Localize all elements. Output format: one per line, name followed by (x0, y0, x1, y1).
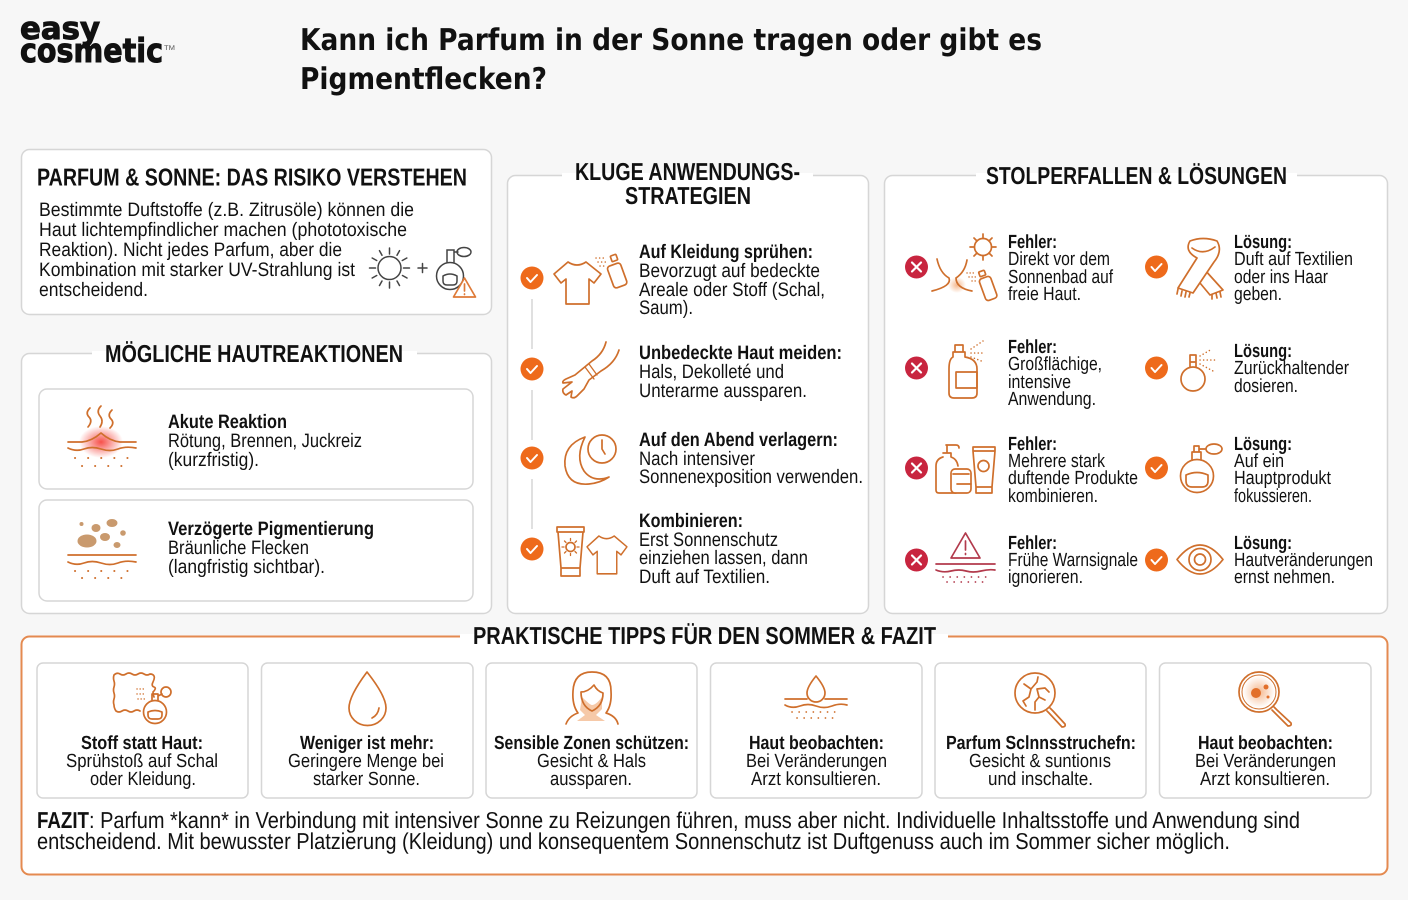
text: conclusion: entscheidend. Mit bewusster Platzierung (Kleidung) und konsequentem Sonnenschutz ist Duftgenuss auch im Sommer sicher möglich. (37, 828, 1230, 854)
heading: tips: PRAKTISCHE TIPPS FÜR DEN SOMMER & FAZIT (473, 623, 936, 650)
icon: pigment spots (68, 519, 136, 578)
icon: check (1145, 356, 1168, 380)
panel: pitfalls and solutions (884, 163, 1388, 614)
text: risk explanation: entscheidend. (39, 279, 148, 301)
text: error 1: freie Haut. (1008, 284, 1081, 305)
text: conclusion: FAZIT (37, 807, 89, 833)
icon: warning on skin (936, 533, 995, 582)
text: solution 3: fokussieren. (1234, 486, 1312, 507)
heading: strategies (575, 159, 800, 210)
text: spray on clothes (639, 241, 825, 319)
row 1 solution (1145, 232, 1353, 305)
heading: risk: PARFUM & SONNE: DAS RISIKO VERSTEHEN (37, 164, 467, 192)
text: error 4: Frühe Warnsignale (1008, 550, 1138, 571)
icon: check (1145, 456, 1168, 480)
icon: arm and hand (563, 342, 619, 398)
text: observe skin: Arzt konsultieren. (751, 769, 881, 790)
text: delayed pigmentation (168, 518, 374, 578)
text: solution 4: ernst nehmen. (1234, 567, 1335, 588)
text: acute reaction: Akute Reaktion (168, 411, 287, 433)
icon: product group (936, 445, 995, 493)
icon: shirt and spray (554, 254, 628, 304)
panel: skin reactions (22, 341, 492, 614)
row 3 solution (1145, 434, 1332, 507)
text: sensitive zones: Gesicht & Hals (537, 751, 646, 772)
text: solution 1: Lösung: (1234, 232, 1292, 253)
text: conclusion (37, 807, 1300, 854)
text: avoid bare skin: Unbedeckte Haut meiden: (639, 342, 842, 364)
text: risk explanation: Kombination mit starker UV-Strahlung ist (39, 259, 356, 281)
text: delayed pigmentation: (langfristig sichtbar). (168, 556, 325, 578)
icon: check (520, 266, 544, 290)
icon: sunscreen tube and shirt (557, 527, 627, 576)
card: delayed pigmentation (39, 500, 473, 601)
text: perfume ingredients: Gesicht & suntionıs (969, 751, 1111, 772)
icon: neck, sun and spray (932, 234, 998, 301)
icon: droplet (349, 672, 386, 725)
row 2 solution (1145, 341, 1350, 397)
text: combine (639, 510, 808, 588)
card: fabric (37, 663, 248, 798)
text: error 4: ignorieren. (1008, 567, 1083, 588)
text: solution 2 (1234, 341, 1350, 397)
heading: strategies: STRATEGIEN (625, 183, 751, 210)
title (300, 23, 1042, 97)
text: less is more: Weniger ist mehr: (300, 733, 434, 754)
text: solution 2: dosieren. (1234, 376, 1298, 397)
text: fabric: oder Kleidung. (90, 769, 196, 790)
text: perfume ingredients: und inschalte. (988, 769, 1093, 790)
text: avoid bare skin: Hals, Dekolleté und (639, 361, 784, 383)
text: solution 1: Duft auf Textilien (1234, 249, 1353, 270)
text: solution 1: geben. (1234, 284, 1282, 305)
icon: moon and clock (565, 435, 616, 484)
card: acute reaction (39, 389, 473, 489)
text: observe skin (746, 733, 887, 790)
text: evening (639, 429, 863, 488)
text: delayed pigmentation: Bräunliche Flecken (168, 537, 309, 559)
text: solution 4 (1234, 533, 1373, 588)
icon: check (520, 358, 544, 380)
icon: woman portrait (566, 672, 618, 724)
icon: magnifier with structure (1015, 673, 1065, 727)
card: less is more (262, 663, 473, 798)
text: combine: Kombinieren: (639, 510, 743, 532)
text: error 2: Großflächige, (1008, 354, 1102, 375)
icon: check (1145, 256, 1168, 278)
panel: risk (22, 150, 492, 314)
title: Pigmentflecken? (300, 62, 547, 97)
text: solution 1: oder ins Haar (1234, 267, 1329, 288)
text: acute reaction: Rötung, Brennen, Juckreiz (168, 430, 362, 452)
text: error 2 (1008, 337, 1102, 410)
text: fabric: Sprühstoß auf Schal (66, 751, 218, 772)
logo: easy (20, 11, 100, 47)
text: spray on clothes: Saum). (639, 297, 693, 319)
icon: x mark (905, 456, 928, 480)
icon: fabric and perfume (114, 673, 171, 724)
row 4 solution (1145, 533, 1373, 588)
icon: perfume bottle (1180, 444, 1222, 492)
text: error 1: Direkt vor dem (1008, 249, 1110, 270)
icon: x mark (905, 548, 928, 572)
text: solution 3: Lösung: (1234, 434, 1292, 455)
text: risk explanation: Bestimmte Duftstoffe (z.B. Zitrusöle) können die (39, 199, 414, 221)
text: solution 3: Auf ein (1234, 451, 1284, 472)
text: error 3: kombinieren. (1008, 486, 1098, 507)
icon: x mark (905, 356, 928, 380)
text: error 2: Anwendung. (1008, 389, 1096, 410)
text: solution 1 (1234, 232, 1353, 305)
heading: pitfalls: STOLPERFALLEN & LÖSUNGEN (986, 163, 1287, 190)
icon: x mark (905, 256, 928, 278)
row 2 error (905, 337, 1102, 410)
text: observe skin 2: Bei Veränderungen (1195, 751, 1336, 772)
text: observe skin 2: Haut beobachten: (1198, 733, 1333, 754)
text: error 3: Fehler: (1008, 434, 1057, 455)
text: error 3: duftende Produkte (1008, 468, 1138, 489)
card: observe skin (710, 663, 922, 798)
text: combine: Duft auf Textilien. (639, 566, 770, 588)
text: combine: Erst Sonnenschutz (639, 529, 778, 551)
icon: sun plus perfume warning (370, 248, 476, 297)
text: sensitive zones: aussparen. (550, 769, 632, 790)
text: error 2: intensive (1008, 372, 1071, 393)
text: less is more: Geringere Menge bei (288, 751, 444, 772)
text: solution 4: Hautveränderungen (1234, 550, 1373, 571)
text: sensitive zones: Sensible Zonen schützen: (494, 733, 689, 754)
text: error 2: Fehler: (1008, 337, 1057, 358)
icon: check (520, 538, 544, 560)
text: spray on clothes: Bevorzugt auf bedeckte (639, 260, 820, 282)
text: perfume ingredients (946, 733, 1136, 790)
panel: strategies (508, 159, 868, 614)
icon: check (520, 446, 544, 470)
logo: cosmetic (20, 31, 163, 70)
icon: skin droplet (785, 676, 847, 718)
text: spray on clothes: Areale oder Stoff (Schal, (639, 279, 825, 301)
heading: skin reactions: MÖGLICHE HAUTREAKTIONEN (105, 341, 403, 368)
text: evening: Auf den Abend verlagern: (639, 429, 838, 451)
row 3 error (905, 434, 1138, 507)
text: observe skin: Haut beobachten: (749, 733, 884, 754)
text: error 3: Mehrere stark (1008, 451, 1105, 472)
panel: summer tips and conclusion (22, 623, 1388, 874)
text: observe skin 2: Arzt konsultieren. (1200, 769, 1330, 790)
text: acute reaction: (kurzfristig). (168, 449, 259, 471)
text: solution 2: Zurückhaltender (1234, 358, 1350, 379)
logo: TM (164, 45, 175, 52)
text: perfume ingredients: Parfum Sclnnsstruchefn: (946, 733, 1136, 754)
icon: check (1145, 548, 1168, 572)
text: evening: Nach intensiver (639, 448, 755, 470)
text: error 4 (1008, 533, 1138, 588)
text: avoid bare skin (639, 342, 842, 402)
card: observe skin 2 (1160, 663, 1371, 798)
item: spray on clothes (520, 241, 825, 319)
icon: large spray bottle (949, 341, 985, 398)
text: error 3 (1008, 434, 1138, 507)
text: fabric (66, 733, 218, 790)
text: solution 3: Hauptprodukt (1234, 468, 1332, 489)
item: avoid bare skin (520, 342, 842, 402)
icon: small atomizer (1181, 349, 1216, 391)
row 1 error (905, 232, 1114, 305)
text: observe skin 2 (1195, 733, 1336, 790)
text: delayed pigmentation: Verzögerte Pigmentierung (168, 518, 374, 540)
card: perfume ingredients (935, 663, 1146, 798)
text: solution 3 (1234, 434, 1332, 507)
text: risk explanation (39, 199, 414, 301)
logo (20, 11, 175, 70)
text: spray on clothes: Auf Kleidung sprühen: (639, 241, 813, 263)
text: less is more (288, 733, 444, 790)
icon: irritated skin (68, 406, 136, 466)
text: evening: Sonnenexposition verwenden. (639, 466, 863, 488)
row 4 error (905, 533, 1138, 588)
text: avoid bare skin: Unterarme aussparen. (639, 380, 807, 402)
title: Kann ich Parfum in der Sonne tragen oder gibt es (300, 23, 1042, 58)
item: evening (520, 429, 863, 488)
text: solution 2: Lösung: (1234, 341, 1292, 362)
text: less is more: starker Sonne. (313, 769, 420, 790)
icon: scarf (1177, 238, 1223, 299)
text: sensitive zones (494, 733, 689, 790)
text: fabric: Stoff statt Haut: (81, 733, 203, 754)
icon: magnifier with spots (1239, 672, 1291, 726)
text: solution 4: Lösung: (1234, 533, 1292, 554)
heading: strategies: KLUGE ANWENDUNGS- (575, 159, 800, 186)
text: combine: einziehen lassen, dann (639, 547, 808, 569)
text: risk explanation: Reaktion). Nicht jedes Parfum, aber die (39, 239, 342, 261)
text: error 4: Fehler: (1008, 533, 1057, 554)
icon: eye (1177, 545, 1223, 574)
text: error 1: Sonnenbad auf (1008, 267, 1114, 288)
text: error 1 (1008, 232, 1114, 305)
text: error 1: Fehler: (1008, 232, 1057, 253)
text: acute reaction (168, 411, 362, 471)
card: sensitive zones (486, 663, 697, 798)
text: risk explanation: Haut lichtempfindlicher machen (phototoxische (39, 219, 407, 241)
text: observe skin: Bei Veränderungen (746, 751, 887, 772)
item: combine (520, 510, 808, 588)
